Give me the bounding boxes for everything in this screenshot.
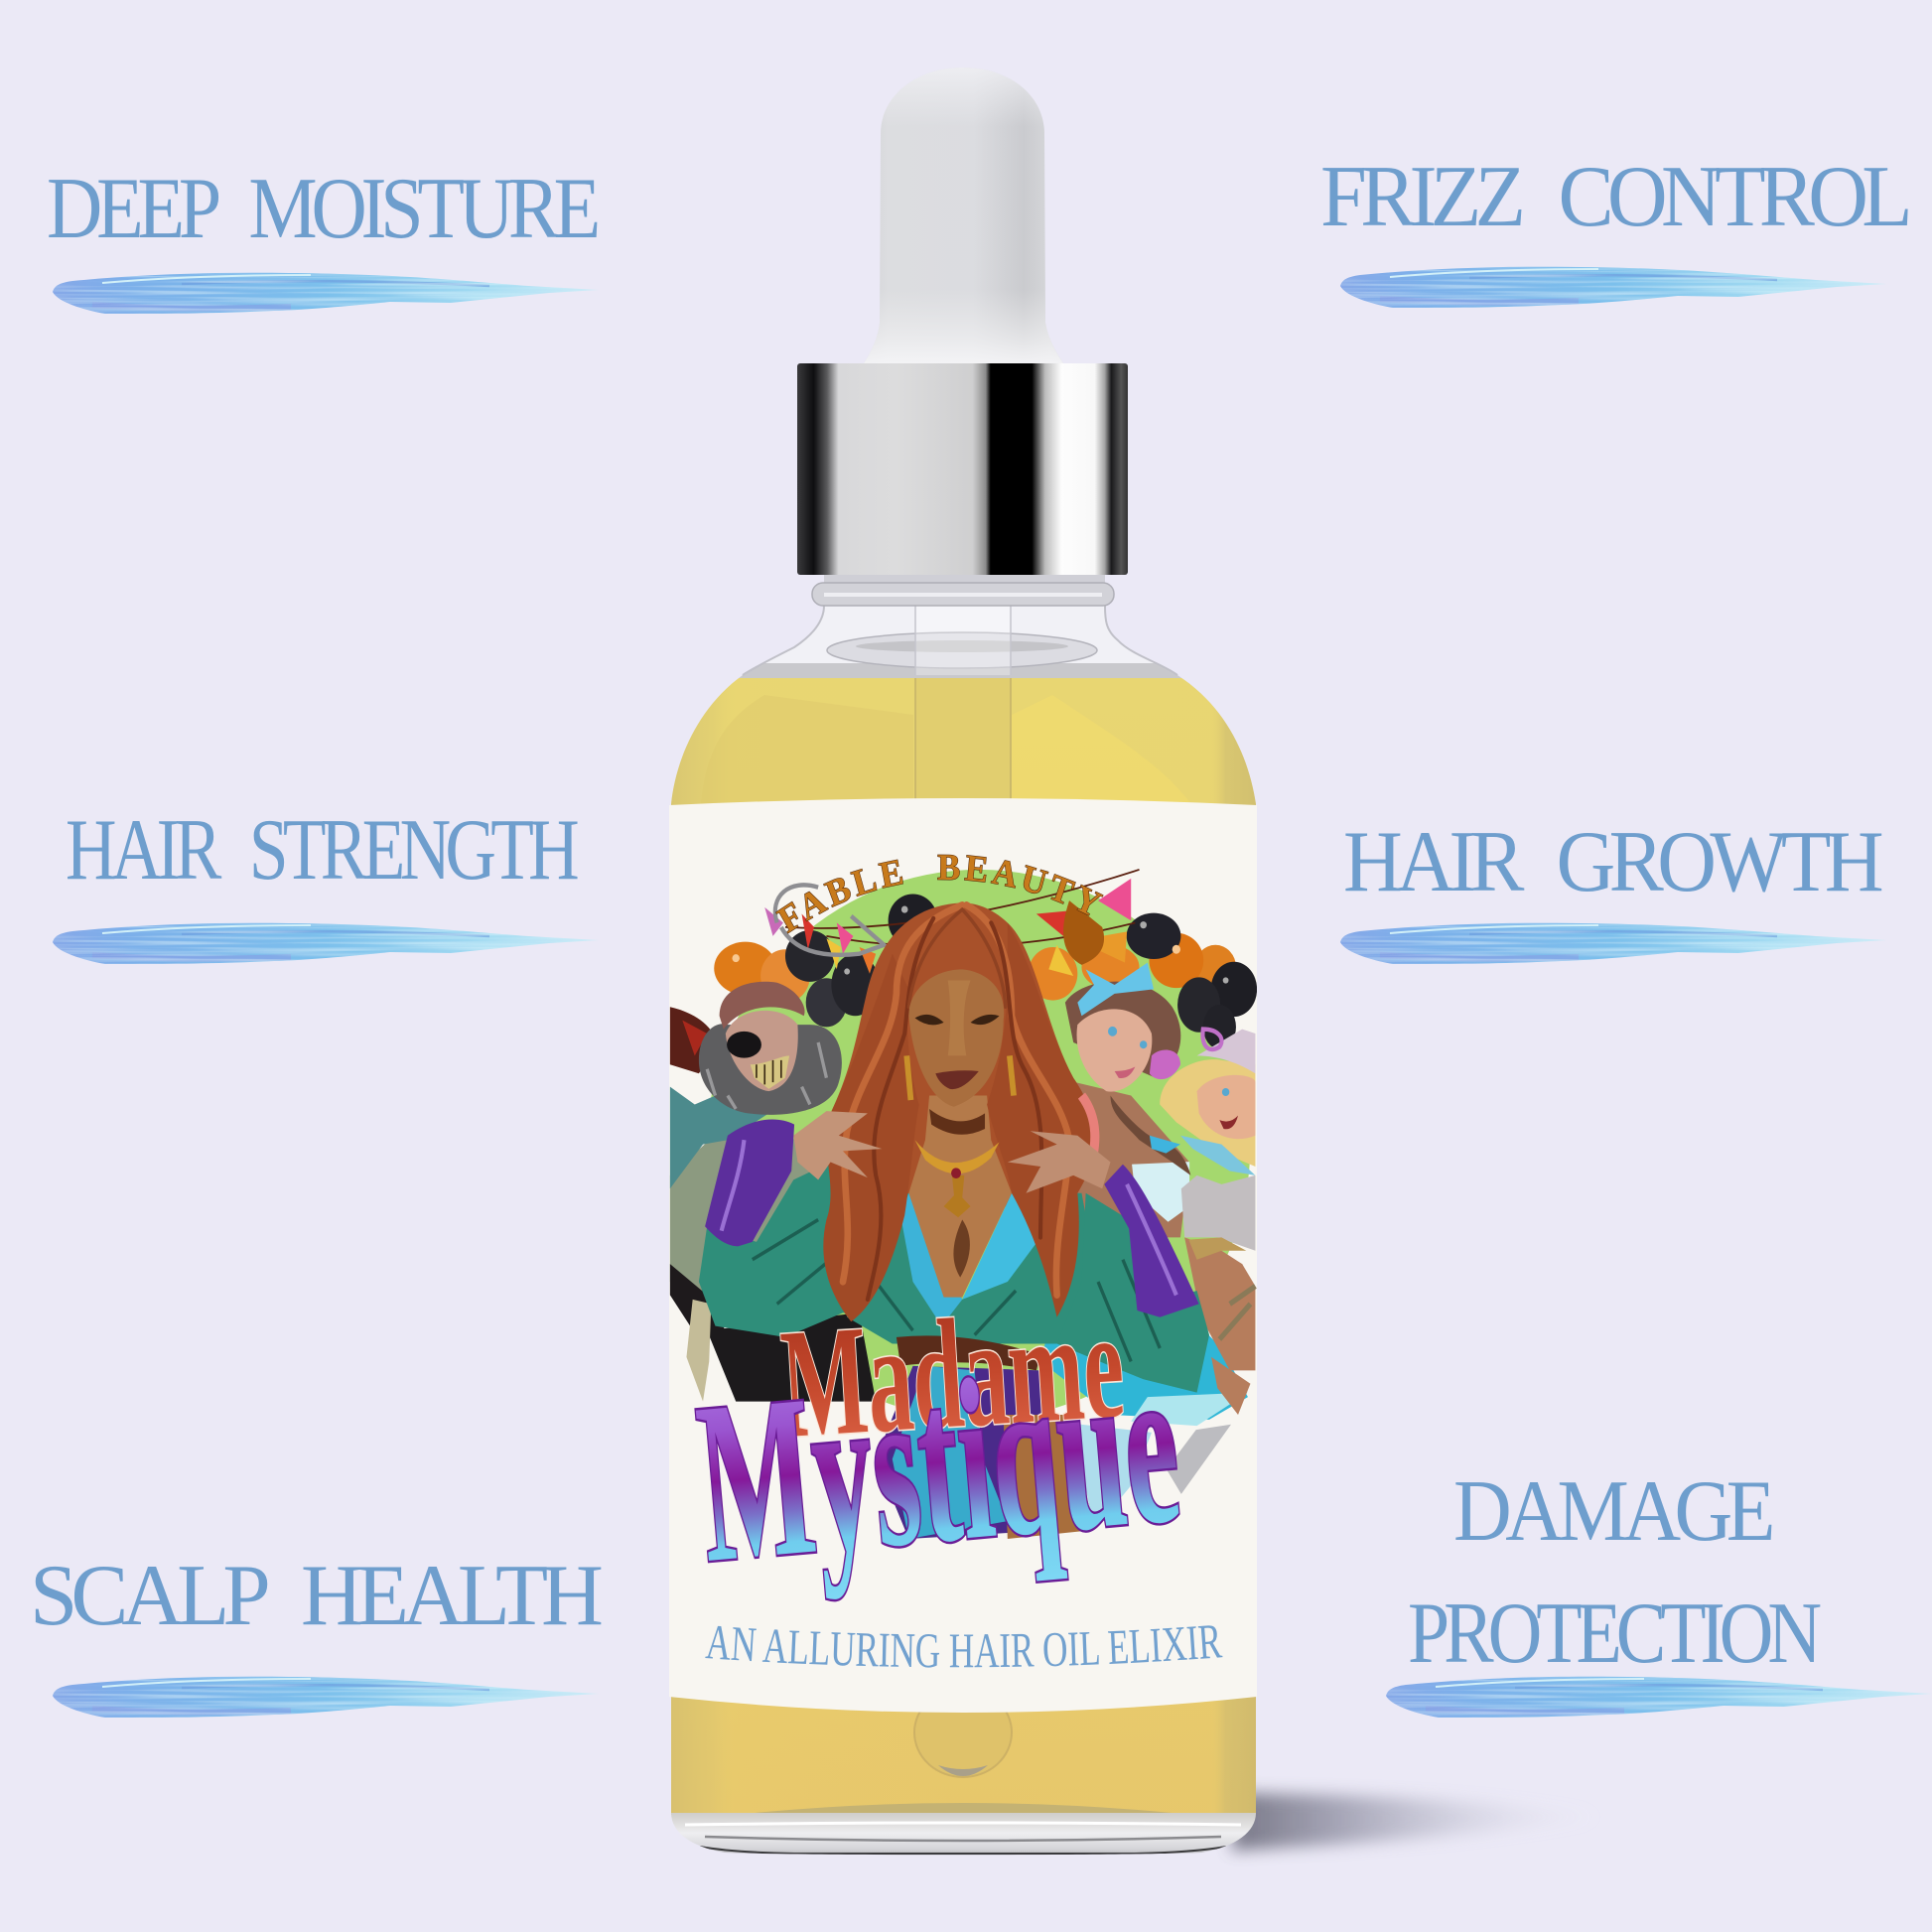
brand: fable beauty: FABLE BEAUTY [775, 854, 1104, 934]
benefit: damage protection [1386, 1463, 1932, 1718]
Madame face [908, 969, 1004, 1107]
blonde knight character [1160, 1030, 1255, 1494]
heading: scalp health: SCALP HEALTH [30, 1548, 601, 1644]
tagline: AN ALLURING HAIR OIL ELIXIR [705, 1625, 1223, 1668]
braided girl character [1040, 963, 1248, 1426]
Madame hair locks [823, 922, 1095, 1321]
benefit: scalp health [30, 1548, 601, 1718]
label [669, 798, 1257, 1713]
brush stroke [1340, 923, 1886, 964]
heading: hair growth: HAIR GROWTH [1343, 814, 1881, 910]
benefit: deep moisture [47, 161, 599, 314]
Madame hair strands [843, 905, 1069, 1300]
bunting and hook [764, 870, 1140, 976]
balloons [714, 894, 1257, 1049]
benefit: frizz control [1320, 149, 1908, 308]
brush stroke [53, 1677, 599, 1718]
glass neck [743, 574, 1177, 675]
heading: protection: PROTECTION [1408, 1586, 1821, 1682]
brush stroke [1340, 267, 1886, 308]
heading: deep moisture: DEEP MOISTURE [47, 161, 598, 257]
bottle shadow [1231, 1793, 1600, 1851]
Madame chest [908, 1096, 1012, 1298]
benefit: hair strength [53, 802, 599, 964]
heading: damage: DAMAGE [1453, 1463, 1772, 1560]
heading: frizz control: FRIZZ CONTROL [1320, 149, 1908, 245]
brush stroke [1386, 1677, 1932, 1718]
Madame blouse [699, 1163, 1209, 1539]
heading: hair strength: HAIR STRENGTH [66, 802, 578, 898]
brush stroke [53, 923, 599, 964]
oil and glass body [665, 596, 1271, 1859]
Madame gloves and jewellery [705, 1055, 1199, 1317]
Madame hands [793, 1111, 1110, 1193]
product name: Madame: Madame [776, 1278, 1128, 1471]
benefit: hair growth [1340, 814, 1886, 964]
Madame hair back [832, 903, 1084, 1207]
product name: Mystique: Mystique [689, 1314, 1188, 1610]
dropper bulb [864, 68, 1063, 363]
bottle [665, 68, 1271, 1859]
pirate character [670, 982, 876, 1402]
silver collar [797, 363, 1128, 575]
green burst backdrop [707, 870, 1250, 1419]
brush stroke [53, 273, 599, 314]
label illustration [669, 854, 1257, 1539]
